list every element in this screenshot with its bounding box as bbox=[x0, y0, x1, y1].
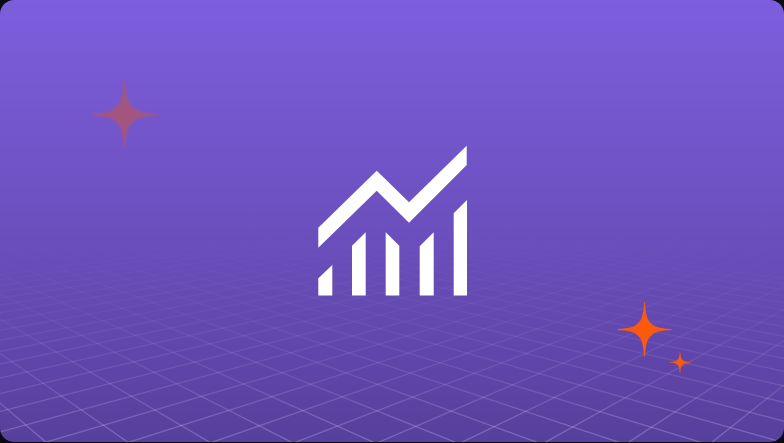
perspective floor grid bbox=[0, 284, 784, 442]
sparkle: faded pink bbox=[91, 81, 158, 148]
sparkle: small orange bbox=[669, 352, 691, 373]
bar 4 bbox=[420, 232, 434, 296]
bar 1 bbox=[318, 265, 332, 296]
sparkle: large orange bbox=[618, 302, 672, 356]
icon: growth chart bbox=[318, 146, 467, 296]
bar 2 bbox=[352, 232, 366, 296]
bar 5 bbox=[454, 200, 467, 296]
trend line bbox=[318, 146, 467, 248]
bar 3 bbox=[386, 232, 399, 296]
